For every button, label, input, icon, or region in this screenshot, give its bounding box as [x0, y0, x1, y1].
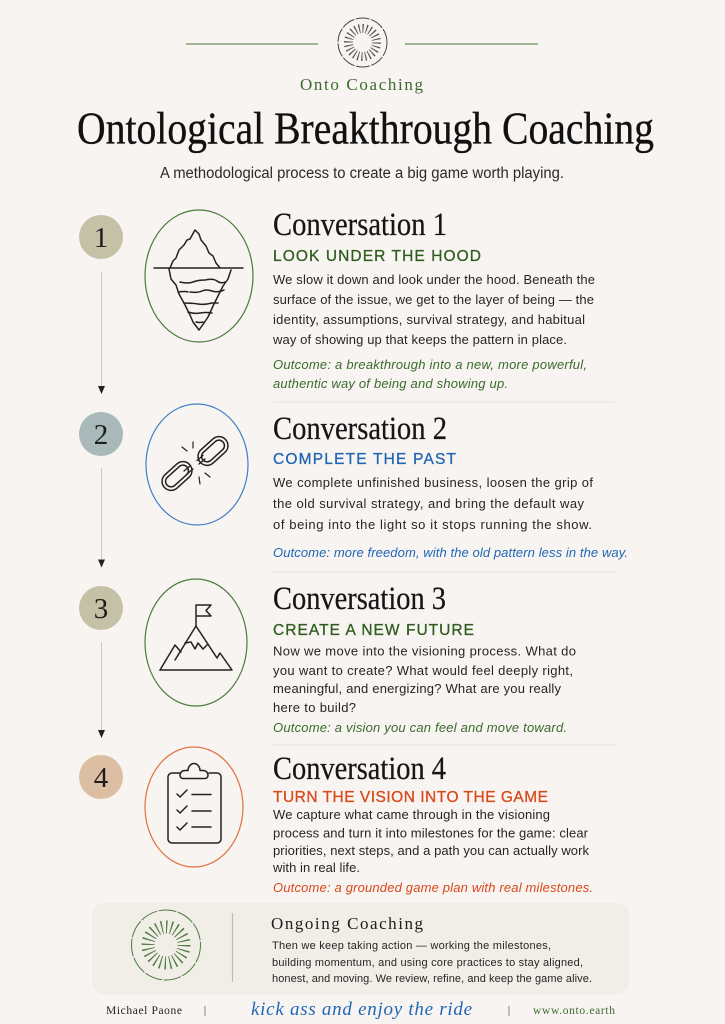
conversation 1 text: way of showing up that keeps the pattern in place. — [272, 332, 567, 347]
conversation 2 text: We complete unfinished business, loosen the grip of — [273, 475, 593, 490]
icon: sun ring — [132, 910, 200, 980]
conversation 2 text: of being into the light so it stops running the show. — [273, 517, 592, 532]
panel: ongoing coaching: building momentum, and using core practices to stay aligned, — [272, 957, 583, 969]
step 4 number — [79, 755, 123, 799]
brand name: Onto Coaching — [300, 75, 424, 94]
header logo — [186, 18, 538, 67]
icon: clipboard checklist — [145, 747, 243, 867]
subtitle: A methodological process to create a big game worth playing. — [160, 165, 564, 182]
conversation 4 text: with in real life. — [272, 860, 360, 875]
conversation 3 text: CREATE A NEW FUTURE — [273, 622, 474, 639]
arrow 1 to 2 — [98, 272, 105, 394]
conversation 1 text: identity, assumptions, survival strategy, and habitual — [273, 312, 585, 327]
conversation 4 text — [272, 751, 593, 895]
conversation 1 text: Outcome: a breakthrough into a new, more powerful, — [273, 357, 587, 372]
conversation 4 text: process and turn it into milestones for the game: clear — [273, 826, 589, 840]
icon: iceberg — [145, 210, 253, 342]
panel: ongoing coaching: Then we keep taking action — working the milestones, — [272, 940, 551, 952]
conversation 3 text: Conversation 3 — [273, 581, 446, 617]
conversation 2 text: the old survival strategy, and bring the default way — [273, 496, 584, 511]
step 4 number: 4 — [94, 762, 109, 794]
conversation 1 text — [272, 207, 595, 391]
footer: kick ass and enjoy the ride — [251, 999, 472, 1020]
step 1 number: 1 — [94, 222, 108, 254]
conversation 3 text: Now we move into the visioning process. What do — [273, 644, 576, 658]
conversation 4 text: Outcome: a grounded game plan with real milestones. — [273, 880, 593, 895]
conversation 3 text: you want to create? What would feel deeply right, — [273, 663, 573, 678]
footer: www.onto.earth — [533, 1005, 615, 1017]
footer — [106, 999, 615, 1020]
footer: Michael Paone — [106, 1005, 182, 1017]
step 3 number: 3 — [94, 593, 108, 625]
conversation 1 text: surface of the issue, we get to the layer of being — the — [273, 292, 594, 307]
step 2 number — [79, 412, 123, 456]
conversation 2 text: Conversation 2 — [273, 411, 447, 447]
conversation 2 text: COMPLETE THE PAST — [273, 451, 457, 468]
conversation 4 text: TURN THE VISION INTO THE GAME — [273, 789, 548, 806]
conversation 3 text: here to build? — [273, 700, 356, 715]
step 2 number: 2 — [94, 419, 108, 451]
conversation 1 text: Conversation 1 — [273, 207, 447, 243]
conversation 3 text: Outcome: a vision you can feel and move toward. — [273, 720, 567, 735]
conversation 1 text: LOOK UNDER THE HOOD — [273, 248, 481, 265]
conversation 2 text: Outcome: more freedom, with the old pattern less in the way. — [273, 545, 628, 560]
step 1 number — [79, 215, 123, 259]
panel: ongoing coaching — [92, 903, 629, 994]
conversation 3 text: meaningful, and energizing? What are you really — [273, 681, 562, 696]
arrow 2 to 3 — [98, 468, 105, 568]
conversation 4 text: priorities, next steps, and a path you can actually work — [273, 843, 590, 858]
panel: ongoing coaching: honest, and moving. We review, refine, and keep the game alive. — [272, 973, 592, 985]
conversation 3 text — [273, 581, 576, 735]
conversation 1 text: We slow it down and look under the hood. Beneath the — [273, 272, 595, 287]
conversation 1 text: authentic way of being and showing up. — [273, 376, 508, 391]
conversation 2 text — [273, 411, 628, 560]
conversation 4 text: Conversation 4 — [273, 751, 446, 787]
arrow 3 to 4 — [98, 642, 105, 738]
icon: mountain with flag — [145, 579, 247, 706]
step 3 number — [79, 586, 123, 630]
panel: ongoing coaching: Ongoing Coaching — [271, 914, 424, 933]
conversation 4 text: We capture what came through in the visioning — [273, 807, 550, 822]
icon: broken chain — [146, 404, 248, 525]
